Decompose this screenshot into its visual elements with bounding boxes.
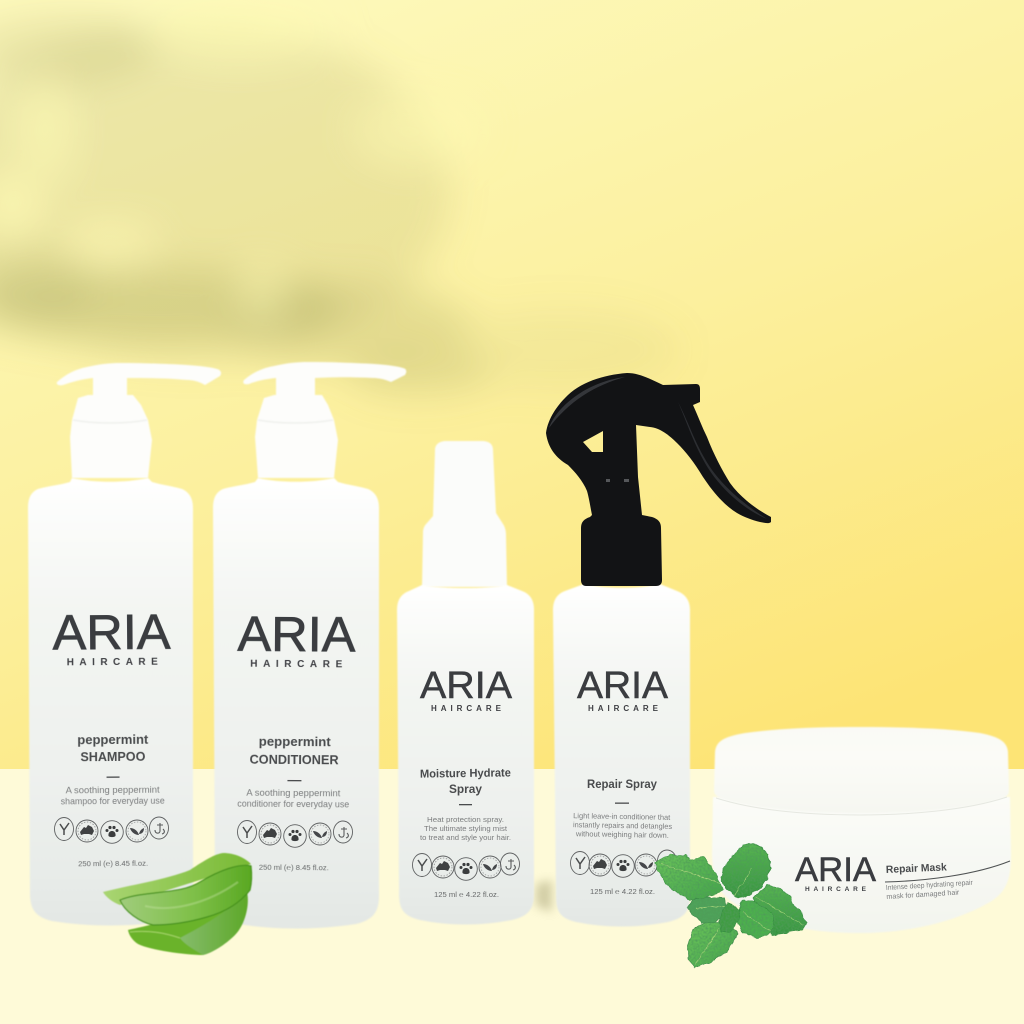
moisture spray label: Moisture Hydrate (420, 767, 511, 781)
repair spray label: without weighing hair down. (575, 829, 669, 840)
mint leaf centre (719, 902, 740, 933)
conditioner label: conditioner for everyday use (237, 799, 349, 809)
product: peppermint shampoo bottle (28, 363, 221, 926)
moisture spray label: to treat and style your hair. (420, 833, 511, 842)
repair spray label (573, 665, 673, 896)
moisture spray cap (422, 441, 507, 587)
mint leaf lower left (688, 923, 739, 968)
repair spray label: 125 ml ℮ 4.22 fl.oz. (590, 887, 655, 896)
black trigger sprayer (546, 373, 771, 586)
conditioner label: peppermint (259, 735, 332, 749)
product: repair spray bottle (546, 373, 771, 926)
jar label: ARIA (795, 851, 876, 889)
repair spray label: instantly repairs and detangles (573, 820, 672, 831)
shampoo label: HAIRCARE (67, 657, 158, 668)
mint leaf upper left (655, 854, 723, 900)
lower aloe slice (128, 890, 248, 955)
moisture spray label (420, 665, 513, 899)
shampoo label: 250 ml (℮) 8.45 fl.oz. (78, 859, 148, 868)
moisture spray label: Heat protection spray. (427, 815, 504, 824)
moisture spray certification badges (412, 853, 520, 880)
moisture spray label: Spray (449, 784, 483, 796)
conditioner body (213, 478, 379, 928)
repair spray label: ARIA (577, 665, 669, 707)
floor shadow between sprays (536, 880, 552, 912)
shampoo label: A soothing peppermint (66, 785, 160, 795)
jar label (795, 851, 1010, 901)
repair spray label: Light leave-in conditioner that (573, 811, 671, 822)
product: moisture hydrate spray bottle (397, 441, 534, 924)
repair spray label: Repair Spray (587, 779, 658, 791)
conditioner certification badges (238, 820, 352, 847)
product: repair mask jar (712, 727, 1011, 933)
repair spray label: HAIRCARE (588, 704, 659, 713)
moisture spray label: ARIA (420, 665, 513, 707)
mint leaf top (721, 843, 771, 898)
mint leaf veins (662, 864, 803, 965)
jar label: mask for damaged hair (886, 888, 960, 901)
product: peppermint conditioner bottle (213, 362, 406, 928)
moisture spray label: The ultimate styling mist (424, 824, 508, 833)
moisture spray label: HAIRCARE (431, 704, 502, 713)
repair spray certification badges (570, 850, 676, 877)
shampoo label: peppermint (77, 733, 149, 747)
repair spray body (553, 584, 690, 926)
shampoo certification badges (54, 817, 168, 843)
aloe vera slices (103, 853, 252, 955)
conditioner label: A soothing peppermint (246, 788, 341, 798)
jar base (712, 797, 1011, 933)
mint leaf right (753, 885, 806, 935)
jar label: HAIRCARE (805, 886, 867, 893)
shampoo label (52, 606, 172, 868)
jar lid (714, 727, 1009, 813)
mint leaf centre right (738, 900, 775, 938)
conditioner label: 250 ml (℮) 8.45 fl.oz. (259, 863, 329, 872)
mint leaf left (687, 897, 727, 925)
jar label: Repair Mask (886, 861, 947, 876)
mint sprig (655, 843, 806, 968)
shampoo label: SHAMPOO (80, 750, 146, 764)
moisture spray label: 125 ml ℮ 4.22 fl.oz. (434, 890, 499, 899)
shampoo label: shampoo for everyday use (61, 796, 165, 806)
conditioner label: ARIA (237, 608, 356, 662)
background wall (0, 0, 1024, 770)
conditioner label (236, 608, 356, 872)
upper aloe slice (103, 853, 252, 925)
jar label: Intense deep hydrating repair (886, 878, 974, 892)
moisture spray body (397, 585, 534, 924)
conditioner pump (243, 362, 406, 478)
conditioner label: CONDITIONER (250, 753, 339, 767)
shampoo body (28, 478, 193, 926)
palm leaf shadow (0, 0, 680, 394)
shampoo pump (57, 363, 221, 478)
floor (0, 769, 1024, 1024)
shampoo label: ARIA (52, 606, 171, 660)
conditioner label: HAIRCARE (250, 659, 343, 670)
